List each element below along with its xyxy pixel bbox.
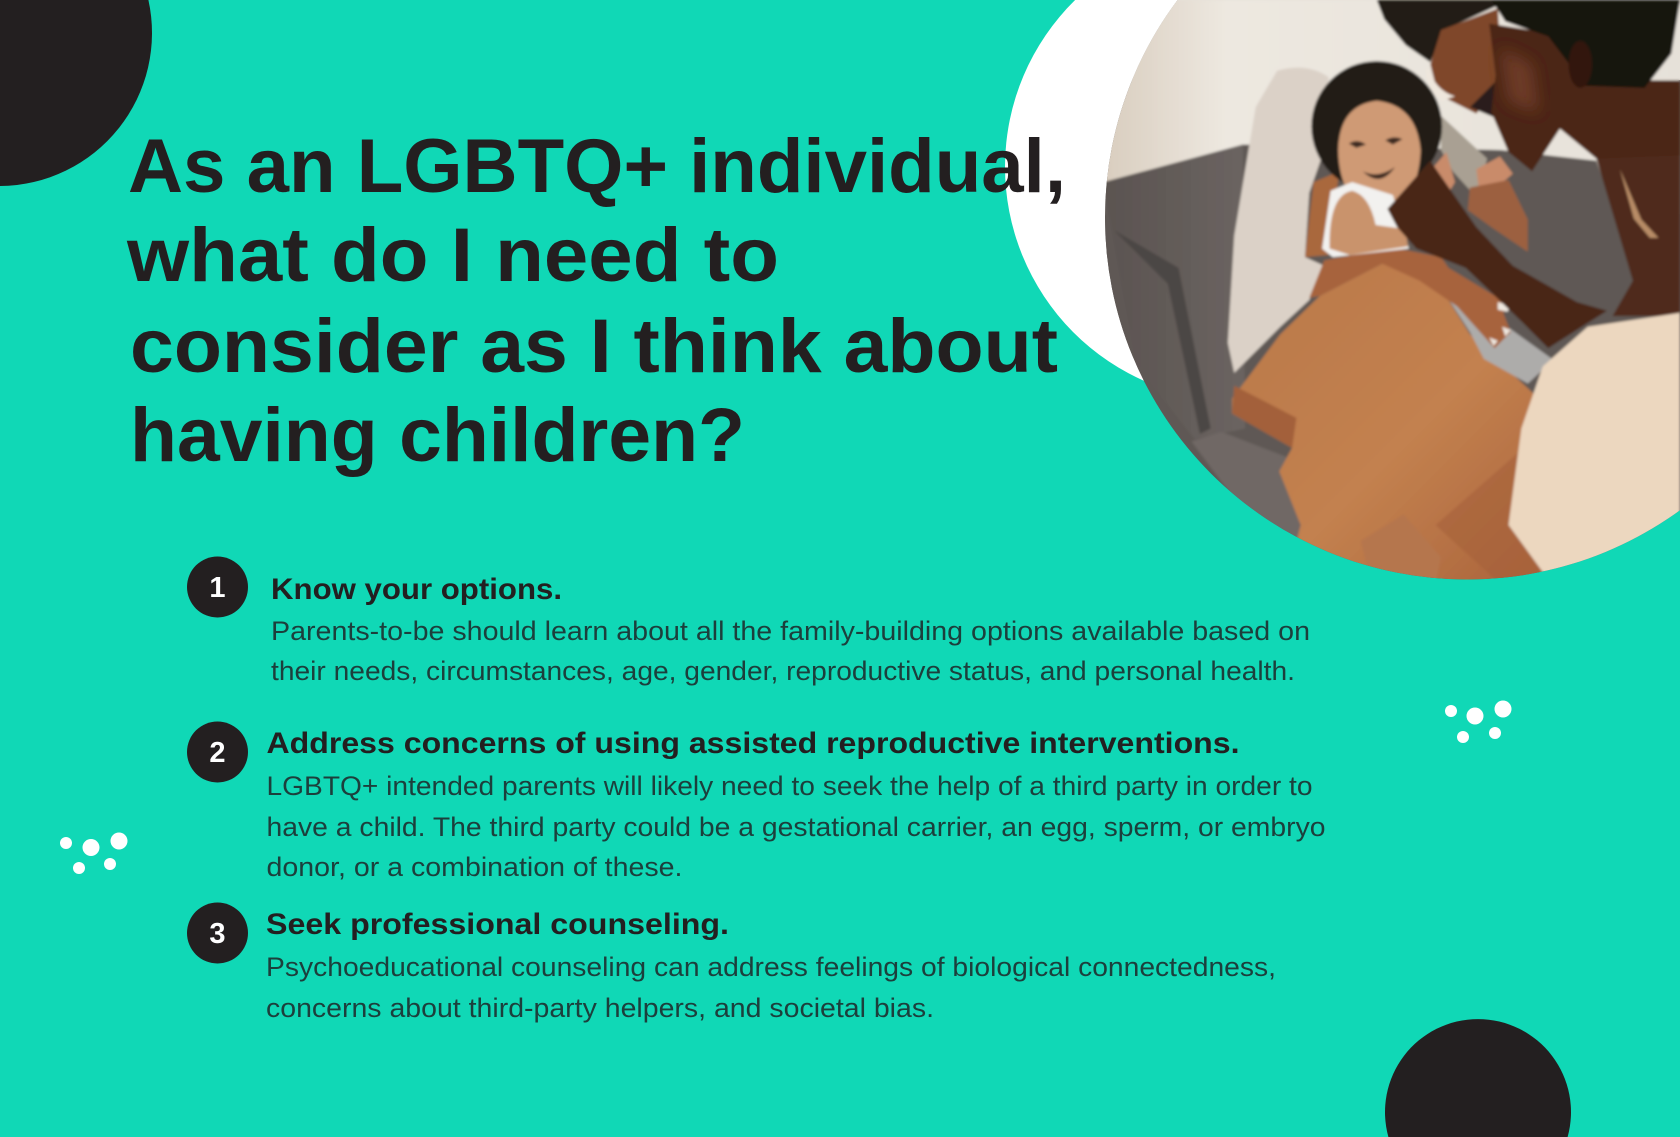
baby eyes and mouth — [1349, 137, 1402, 179]
left woman face — [1430, 9, 1502, 114]
inner cardigan right — [1441, 116, 1487, 197]
body 3: Psychoeducational counseling can address feelings of biological connectedness, — [266, 952, 1276, 982]
left woman hair — [1377, 0, 1500, 62]
white circle behind photo — [1005, 0, 1473, 401]
number badge 3 — [187, 902, 248, 964]
body 1 — [271, 616, 1310, 686]
body 3 — [266, 952, 1276, 1023]
number badge 2 — [187, 722, 248, 782]
photo top band — [1100, 0, 1680, 80]
peach trousers — [1509, 313, 1680, 584]
body 2: LGBTQ+ intended parents will likely need to seek the help of a third party in order to — [266, 771, 1312, 801]
sofa seat — [1192, 432, 1300, 537]
white dots: right — [1445, 700, 1512, 743]
body 1: their needs, circumstances, age, gender, reproductive status, and personal health. — [271, 656, 1295, 686]
number badge 2: 2 — [209, 737, 226, 769]
baby face — [1338, 101, 1421, 210]
skirt — [1232, 264, 1551, 584]
right woman supporting hand — [1468, 180, 1528, 252]
right woman neck and face — [1489, 24, 1680, 171]
photo underlay — [1100, 0, 1680, 600]
sofa base underlay — [1105, 143, 1650, 490]
skirt hem shadow — [1438, 456, 1516, 552]
heading 3: Seek professional counseling. — [266, 908, 729, 941]
baby hand and foot — [1432, 152, 1514, 191]
decorative dark circle: top left — [0, 0, 152, 186]
necklace strap — [1620, 169, 1659, 238]
body 1: Parents-to-be should learn about all the family-building options available based on — [271, 616, 1310, 646]
right woman torso — [1595, 152, 1680, 317]
left woman beard shadow — [1470, 82, 1496, 118]
number badge 1: 1 — [209, 572, 226, 604]
right woman cheek highlight — [1500, 48, 1539, 112]
title: what do I need to — [126, 213, 779, 298]
sofa left arm — [1205, 147, 1244, 435]
body 2: have a child. The third party could be a gestational carrier, an egg, sperm, or embryo — [266, 812, 1326, 842]
decorative dark circle: bottom right — [1385, 1019, 1571, 1137]
right woman ear — [1569, 41, 1592, 88]
item 2: assisted reproductive interventions — [187, 722, 1326, 882]
bare legs under skirt — [1364, 536, 1438, 578]
body 3: concerns about third-party helpers, and societal bias. — [266, 993, 934, 1023]
body 2 — [266, 771, 1326, 882]
baby hair — [1311, 61, 1442, 192]
title: having children? — [130, 393, 745, 478]
sofa arm fold — [1114, 230, 1211, 434]
right woman back arm and hand — [1387, 161, 1607, 348]
title — [126, 124, 1066, 478]
item 1: know your options — [187, 556, 1310, 686]
left woman smile — [1433, 81, 1456, 100]
title: consider as I think about — [130, 304, 1058, 389]
body 2: donor, or a combination of these. — [266, 852, 682, 882]
photo: family on sofa — [1098, 0, 1680, 600]
white dots: left — [60, 832, 128, 874]
heading 1: Know your options. — [271, 573, 562, 606]
fingernails — [1489, 302, 1511, 346]
number badge 1 — [187, 556, 248, 618]
right woman hair — [1491, 0, 1680, 88]
item 3: professional counseling — [187, 902, 1276, 1023]
left woman forearm and hand — [1309, 247, 1511, 348]
skirt fold shadow — [1232, 386, 1296, 448]
heading 2: Address concerns of using assisted reproductive interventions. — [266, 727, 1240, 760]
cardigan — [1228, 68, 1329, 373]
baby arm — [1330, 191, 1408, 255]
baby grey leg — [1450, 300, 1552, 385]
left woman chest skin — [1305, 171, 1339, 257]
title: As an LGBTQ+ individual, — [128, 124, 1066, 209]
baby onesie — [1322, 182, 1409, 257]
number badge 3: 3 — [209, 918, 226, 950]
photo wall — [1098, 0, 1680, 214]
